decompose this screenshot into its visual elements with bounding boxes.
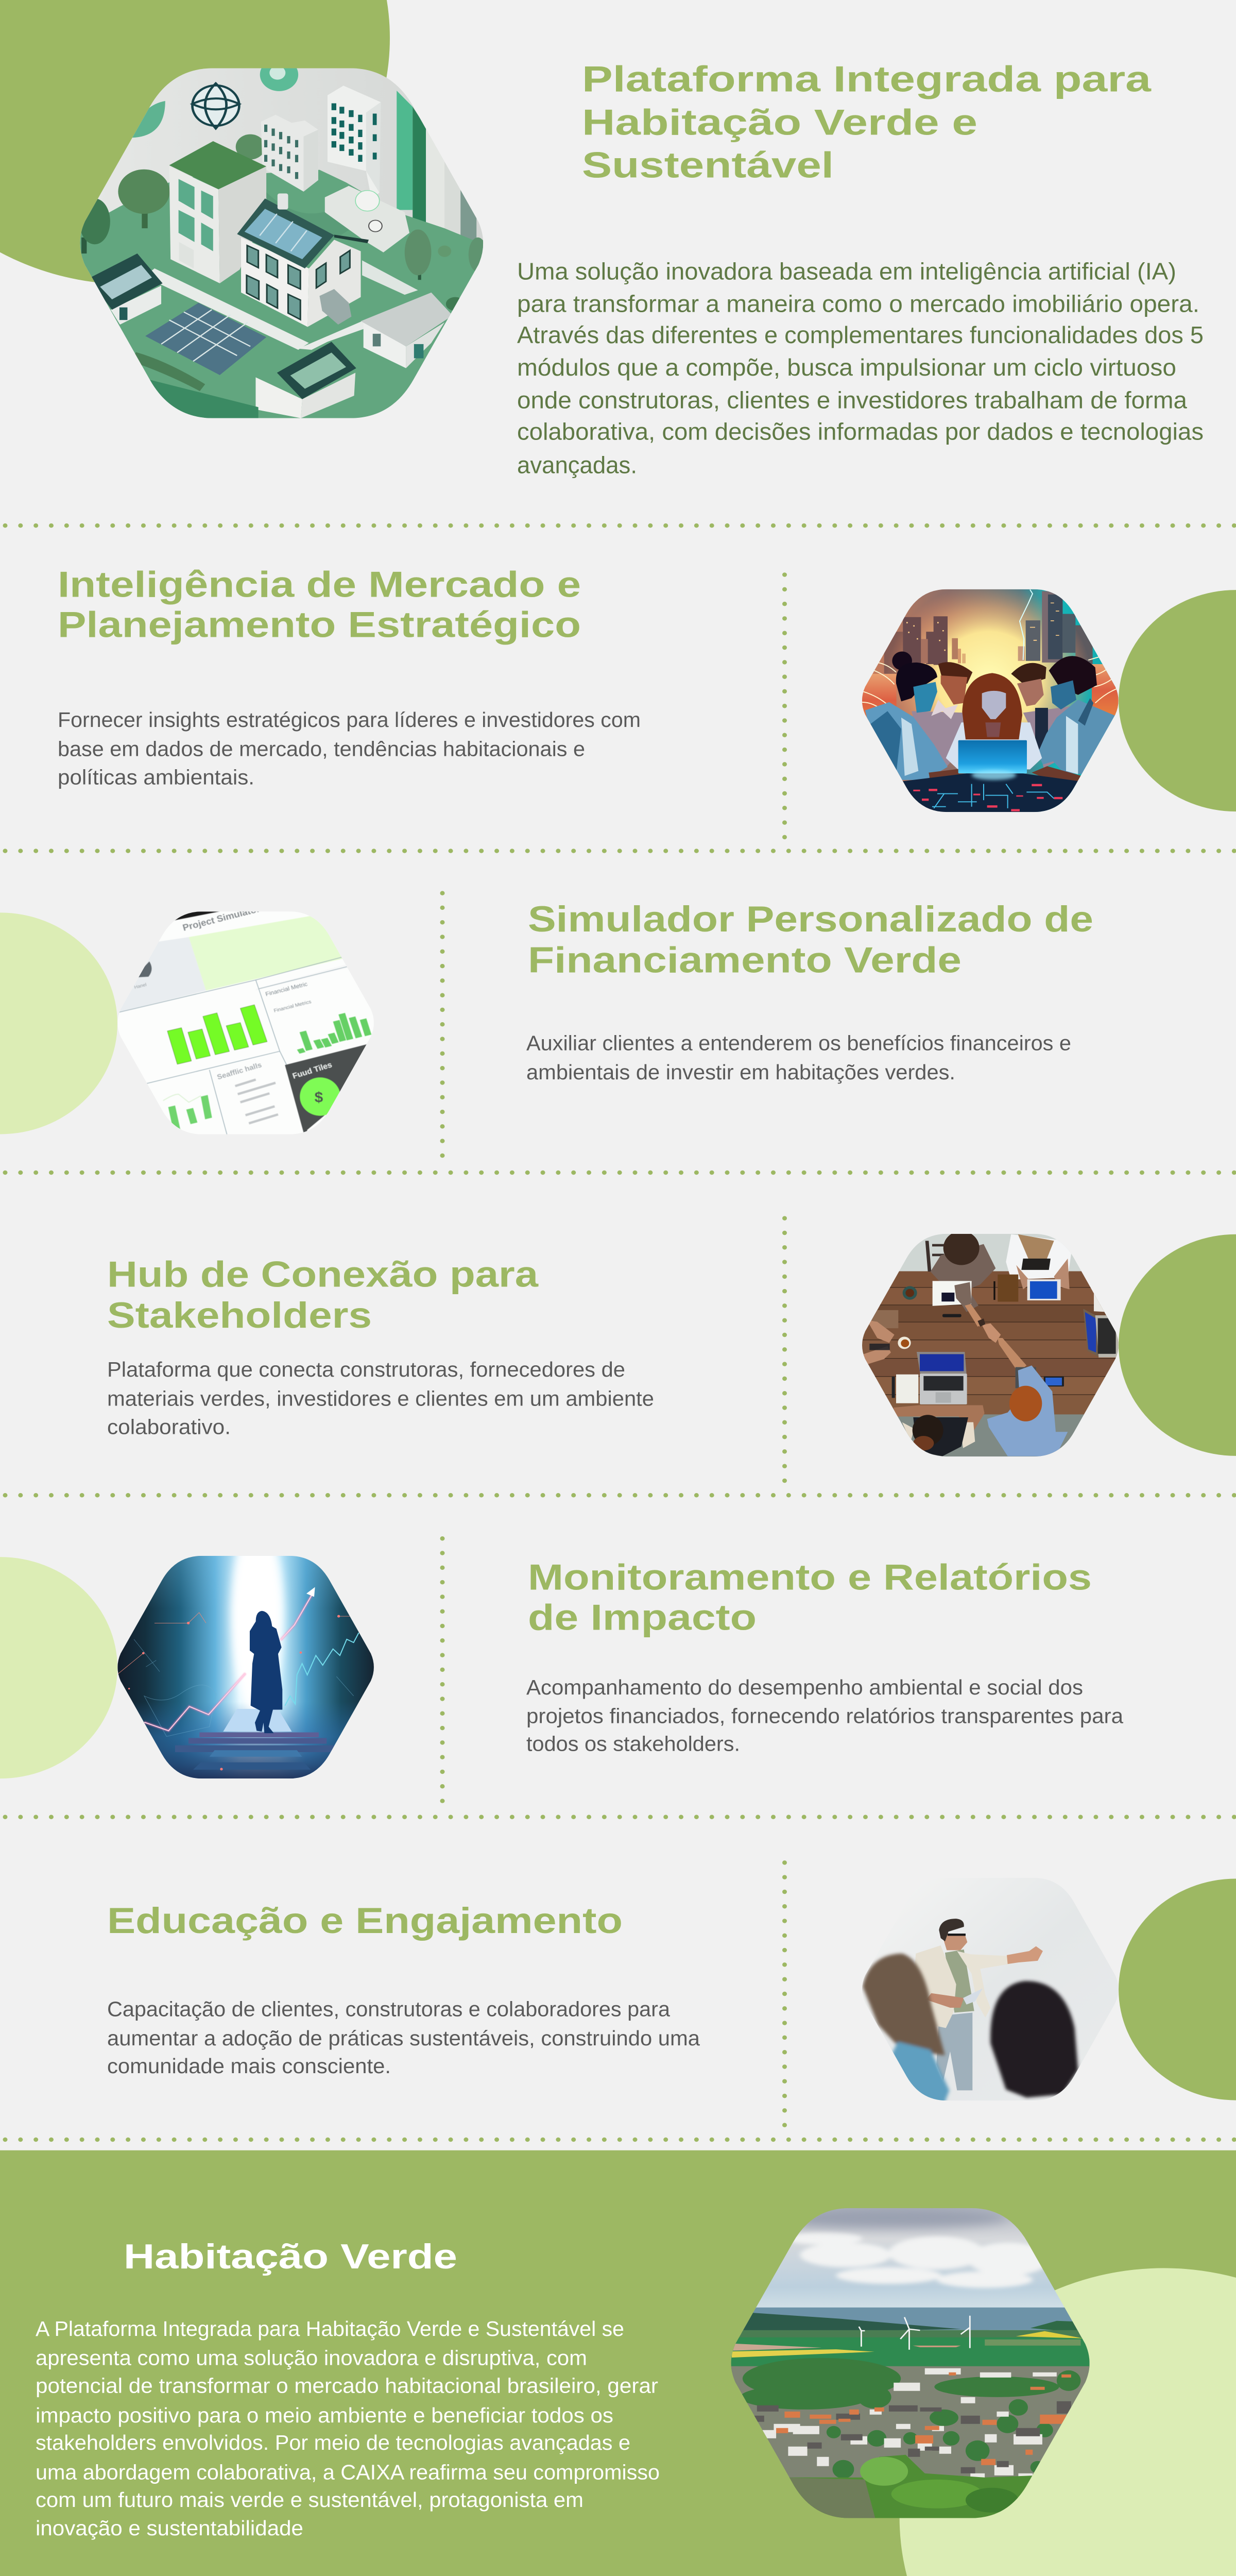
image: team around a laptop xyxy=(855,583,1123,817)
panel: green financing simulator xyxy=(0,893,1093,1157)
description: base em dados de mercado, tendências habitacionais e xyxy=(58,737,585,760)
image: project simulator dashboard: $ xyxy=(315,1090,323,1106)
image: project simulator dashboard xyxy=(113,904,381,1140)
intro text: módulos que a compõe, busca impulsionar um ciclo virtuoso xyxy=(517,354,1176,381)
heading: Financiamento Verde xyxy=(528,940,962,980)
description: comunidade mais consciente. xyxy=(107,2054,391,2078)
closing text: inovação e sustentabilidade xyxy=(36,2516,303,2540)
heading xyxy=(107,1255,539,1335)
title: Habitação Verde e xyxy=(582,102,977,143)
heading: Inteligência de Mercado e xyxy=(58,564,581,605)
image: town and wind turbines xyxy=(721,2201,1097,2524)
presenter legs xyxy=(936,2012,972,2090)
decorative green circle xyxy=(0,0,390,284)
description: ambientais de investir em habitações verdes. xyxy=(526,1060,955,1084)
heading xyxy=(528,1557,1092,1638)
image: sustainable neighbourhood xyxy=(72,58,489,423)
panel: market intelligence xyxy=(58,564,1236,838)
heading: Planejamento Estratégico xyxy=(58,604,581,645)
description: Capacitação de clientes, construtoras e colaboradores para xyxy=(107,1997,671,2021)
description xyxy=(107,1358,654,1438)
closing text: A Plataforma Integrada para Habitação Verde e Sustentável se xyxy=(36,2317,624,2341)
top people xyxy=(925,1241,946,1272)
table xyxy=(896,773,1085,817)
image: presenter and audience xyxy=(855,1873,1123,2108)
heading: de Impacto xyxy=(528,1597,757,1638)
steps xyxy=(199,1733,319,1737)
image: woman facing rising chart xyxy=(113,1518,381,1784)
image: project simulator dashboard: Project Simulator xyxy=(181,904,261,933)
shirt and jacket xyxy=(945,1950,974,2012)
intro text: onde construtoras, clientes e investidores trabalham de forma xyxy=(517,387,1188,414)
description xyxy=(526,1675,1124,1755)
laptops xyxy=(917,1352,967,1374)
closing text: apresenta como uma solução inovadora e disruptiva, com xyxy=(36,2346,587,2369)
mid building xyxy=(236,134,265,160)
pink trend line xyxy=(144,1594,313,1731)
closing text: com um futuro mais verde e sustentável, protagonista em xyxy=(36,2488,583,2512)
woman silhouette xyxy=(250,1611,282,1733)
tree band and town xyxy=(721,2366,1097,2482)
intro text: avançadas. xyxy=(517,452,637,479)
image: meeting seen from above xyxy=(855,1229,1123,1463)
stock chart xyxy=(285,1633,359,1706)
head xyxy=(943,1934,967,1950)
panel: conclusion Habitação Verde xyxy=(0,2150,1236,2576)
description: Acompanhamento do desempenho ambiental e social dos xyxy=(526,1675,1083,1699)
decorative circle left xyxy=(0,912,117,1134)
panel: monitoring and impact reports xyxy=(0,1518,1124,1802)
decorative circle right xyxy=(1119,590,1236,811)
hedges and band xyxy=(149,380,259,423)
right white house xyxy=(364,321,406,368)
heading: Monitoramento e Relatórios xyxy=(528,1557,1092,1598)
central house xyxy=(241,238,309,327)
description: materiais verdes, investidores e clientes em um ambiente xyxy=(107,1387,654,1410)
decorative circle right xyxy=(1119,1234,1236,1456)
right small block xyxy=(325,186,409,252)
heading: Habitação Verde xyxy=(124,2237,457,2276)
intro text: Uma solução inovadora baseada em inteligência artificial (IA) xyxy=(517,259,1176,285)
globe xyxy=(193,83,239,128)
decorative circle left xyxy=(0,1557,117,1778)
image: project simulator dashboard: Fuud Tiles xyxy=(291,1061,333,1081)
bottom people xyxy=(987,1365,1068,1456)
description: políticas ambientais. xyxy=(58,765,254,789)
image: project simulator dashboard: Financial Metrics xyxy=(273,999,312,1014)
image: project simulator dashboard: Hanel xyxy=(134,982,147,990)
closing text: stakeholders envolvidos. Por meio de tecnologias avançadas e xyxy=(36,2431,630,2454)
left small house xyxy=(111,285,161,325)
blurred audience xyxy=(863,1954,1078,2108)
description xyxy=(58,708,641,789)
people xyxy=(912,711,967,768)
intro text: colaborativa, com decisões informadas por dados e tecnologias xyxy=(517,419,1204,445)
title: Plataforma Integrada para xyxy=(582,59,1152,99)
panel: education and engagement xyxy=(107,1862,1236,2128)
trees xyxy=(142,213,148,229)
heading xyxy=(58,564,581,645)
description xyxy=(107,1997,700,2078)
solar field xyxy=(145,303,266,375)
heading: Stakeholders xyxy=(107,1295,372,1335)
intro text: Através das diferentes e complementares funcionalidades dos 5 xyxy=(517,322,1204,349)
heading xyxy=(528,899,1093,980)
closing text: impacto positivo para o meio ambiente e beneficiar todos os xyxy=(36,2403,613,2427)
tall tower xyxy=(328,86,381,198)
closing text: uma abordagem colaborativa, a CAIXA reafirma seu compromisso xyxy=(36,2460,660,2484)
description: aumentar a adoção de práticas sustentáveis, construindo uma xyxy=(107,2026,700,2050)
heading: Simulador Personalizado de xyxy=(528,899,1093,940)
intro text xyxy=(517,259,1204,479)
title xyxy=(582,59,1152,185)
description: todos os stakeholders. xyxy=(526,1732,740,1755)
title: Sustentável xyxy=(582,145,834,185)
closing text: potencial de transformar o mercado habitacional brasileiro, gerar xyxy=(36,2374,658,2397)
description: Plataforma que conecta construtoras, fornecedores de xyxy=(107,1358,625,1381)
description: projetos financiados, fornecendo relatórios transparentes para xyxy=(526,1704,1124,1727)
description: Fornecer insights estratégicos para líderes e investidores com xyxy=(58,708,641,732)
items on table xyxy=(933,1281,972,1306)
main tall building xyxy=(169,166,220,283)
road xyxy=(144,268,309,350)
heading: Educação e Engajamento xyxy=(107,1901,623,1941)
closing text xyxy=(36,2317,660,2540)
intro text: para transformar a maneira como o mercado imobiliário opera. xyxy=(517,291,1199,317)
image: project simulator dashboard: Financial Metric xyxy=(265,981,308,997)
description: Auxiliar clientes a entenderem os benefícios financeiros e xyxy=(526,1031,1071,1055)
panel: introduction xyxy=(0,0,1204,479)
decorative light circle xyxy=(900,2268,1236,2576)
heading: Hub de Conexão para xyxy=(107,1255,539,1295)
image: project simulator dashboard: Seafflic halls xyxy=(216,1061,263,1081)
decorative circle right xyxy=(1119,1878,1236,2100)
panel: stakeholder hub xyxy=(107,1218,1236,1483)
description xyxy=(526,1031,1071,1084)
description: colaborativo. xyxy=(107,1415,231,1438)
bottom house xyxy=(255,377,302,418)
foreground trees xyxy=(769,2455,1038,2524)
laptop xyxy=(958,740,1027,773)
handshake xyxy=(982,1324,1001,1343)
